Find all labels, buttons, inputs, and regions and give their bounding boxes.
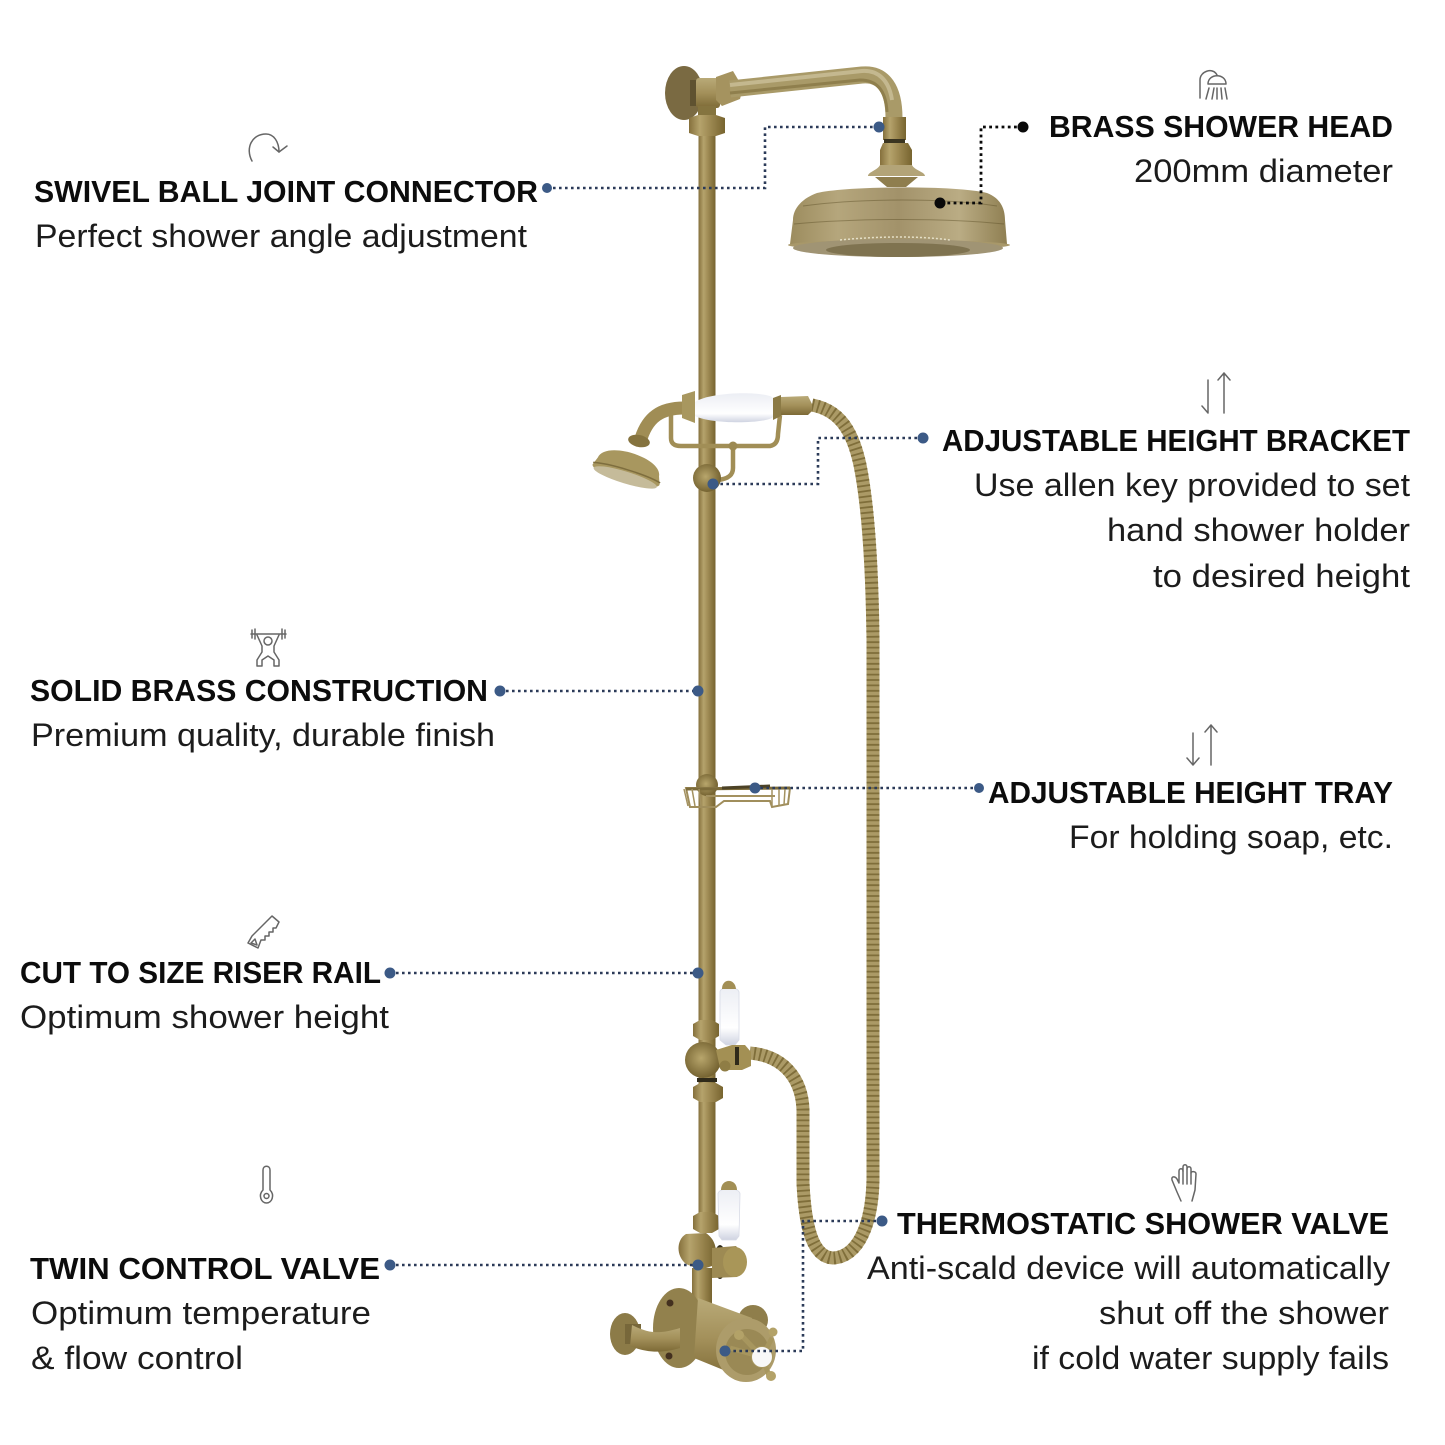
label: solid brass construction: Premium quality, durable finish (31, 717, 495, 753)
label: adjustable height bracket: to desired height (1153, 558, 1410, 594)
label: thermostatic shower valve: Anti-scald device will automatically (867, 1250, 1391, 1286)
leader: riser rail (384, 968, 704, 978)
hand shower holder bracket (671, 413, 780, 480)
label: thermostatic shower valve: shut off the shower (1099, 1295, 1389, 1331)
hand shower (590, 391, 812, 493)
twin control valve (610, 1181, 778, 1382)
label: brass shower head: BRASS SHOWER HEAD (1049, 109, 1393, 144)
leader: thermostatic valve (720, 1216, 888, 1356)
icon: shower (1200, 71, 1227, 99)
soap tray (684, 774, 790, 807)
leader: twin control valve (384, 1260, 704, 1270)
label: adjustable height tray: ADJUSTABLE HEIGHT TRAY (988, 775, 1393, 810)
label: solid brass construction: SOLID BRASS CONSTRUCTION (30, 673, 488, 708)
label: cut to size riser rail: Optimum shower height (20, 999, 389, 1035)
label: thermostatic shower valve: if cold water supply fails (1032, 1340, 1389, 1376)
hose (750, 405, 873, 1258)
label: adjustable height bracket: hand shower holder (1107, 512, 1410, 548)
label: swivel ball joint connector: Perfect shower angle adjustment (35, 218, 527, 254)
sliding bracket ball (693, 442, 738, 492)
icon: thermometer (260, 1166, 273, 1203)
label: twin control valve (30, 1251, 380, 1376)
label: thermostatic shower valve (867, 1206, 1391, 1376)
icon: rotate arrow (249, 134, 287, 161)
label: cut to size riser rail (20, 955, 389, 1035)
label: adjustable height tray: For holding soap, etc. (1069, 819, 1393, 855)
leader: brass shower head (934, 122, 1028, 208)
leader: adjustable height bracket (708, 432, 928, 490)
label: adjustable height tray (988, 775, 1393, 855)
label: thermostatic shower valve: THERMOSTATIC SHOWER VALVE (897, 1206, 1389, 1241)
label: solid brass construction (30, 673, 495, 753)
shower arm (730, 71, 894, 118)
label: cut to size riser rail: CUT TO SIZE RISER RAIL (20, 955, 381, 990)
wall flange and top connector (665, 66, 743, 136)
label: brass shower head (1049, 109, 1393, 189)
leader: swivel connector (542, 122, 884, 193)
icon: weightlifter (251, 629, 286, 666)
label: adjustable height bracket (942, 423, 1410, 594)
label: twin control valve: & flow control (31, 1340, 243, 1376)
leader: adjustable tray (750, 782, 984, 794)
icon: up down arrows bracket (1202, 373, 1230, 413)
label: adjustable height bracket: Use allen key provided to set (974, 467, 1410, 503)
label: swivel ball joint connector: SWIVEL BALL JOINT CONNECTOR (34, 174, 538, 209)
label: twin control valve: TWIN CONTROL VALVE (30, 1251, 380, 1286)
label: adjustable height bracket: ADJUSTABLE HEIGHT BRACKET (942, 423, 1410, 458)
riser rail (698, 125, 716, 1225)
icon: hand (1172, 1165, 1196, 1201)
icon: saw (248, 916, 279, 948)
icon: up down arrows tray (1187, 725, 1217, 765)
label: swivel ball joint connector (34, 174, 538, 254)
label: twin control valve: Optimum temperature (31, 1295, 371, 1331)
diverter assembly (685, 981, 751, 1102)
shower head (788, 117, 1010, 257)
shower product illustration (590, 66, 1010, 1382)
label: brass shower head: 200mm diameter (1134, 153, 1393, 189)
leader: solid brass (494, 686, 704, 696)
